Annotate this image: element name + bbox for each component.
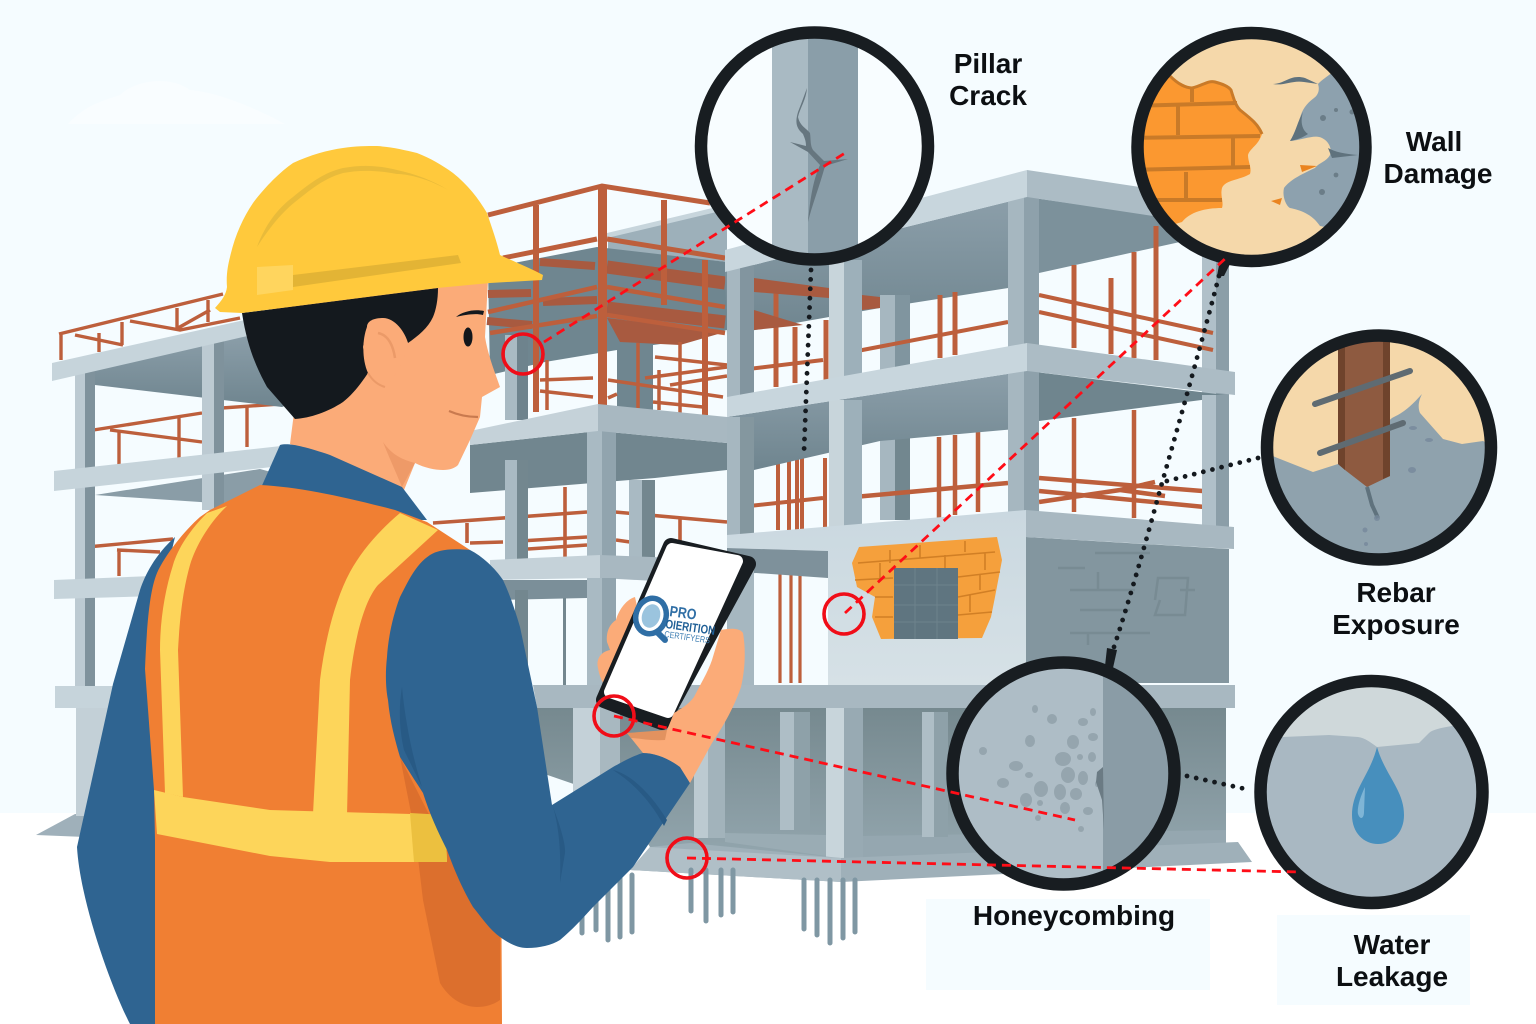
corroded rebar [1338, 329, 1390, 487]
label: wall damage: Wall [1406, 126, 1462, 157]
magnifier: honeycombing [947, 648, 1183, 891]
red callout line: wall damage [824, 256, 1228, 634]
label: water leakage: Water [1354, 929, 1430, 960]
front hand [627, 629, 745, 783]
voids [979, 705, 1099, 832]
exposed concrete [1284, 74, 1360, 227]
building: right wing [533, 170, 1252, 943]
mouth [449, 411, 478, 417]
water drop [1352, 747, 1404, 844]
label: pillar crack: Pillar [954, 48, 1022, 79]
eyebrow [456, 310, 484, 317]
magnifier: pillar crack [695, 27, 935, 267]
app logo [631, 594, 716, 645]
worker [77, 146, 748, 1024]
label: pillar crack: Crack [949, 80, 1027, 111]
app logo: OIERITION [665, 617, 716, 638]
building: left wing [36, 294, 300, 838]
label: wall damage [1384, 126, 1492, 189]
left wing rebar [59, 294, 280, 576]
right wing rebar [740, 226, 1215, 683]
smartphone [604, 546, 748, 722]
ground storey [533, 708, 1226, 860]
dotted connector: wall damage to honeycombing [1113, 276, 1219, 650]
jacket collar [260, 444, 427, 520]
sleeve folds [400, 687, 667, 883]
jaw shadow [383, 442, 415, 487]
label: rebar exposure [1332, 577, 1460, 640]
dotted connector: water leakage [1187, 776, 1250, 790]
label: wall damage: Damage [1384, 158, 1492, 189]
building: central wing with upper rebar [433, 186, 727, 686]
magnifier: wall damage [1131, 26, 1372, 276]
crack [790, 88, 848, 222]
exposed brick [1144, 77, 1262, 224]
foundation piles [582, 870, 855, 943]
magnifier tail [1105, 648, 1117, 668]
red callout line: pillar crack [503, 153, 845, 374]
left arm [77, 537, 175, 1024]
label: rebar exposure: Exposure [1332, 609, 1460, 640]
label: water leakage: Leakage [1336, 961, 1448, 992]
hair [242, 288, 438, 419]
eye [464, 328, 472, 346]
rebar cage [487, 186, 727, 415]
app logo: CERTIFYERS [664, 629, 711, 645]
red callout line: honeycombing [594, 696, 1075, 820]
magnifier: water leakage [1254, 660, 1490, 911]
label: pillar crack [949, 48, 1027, 111]
app logo: PRO [668, 603, 698, 624]
ear [363, 321, 408, 387]
label: honeycombing: Honeycombing [973, 900, 1175, 931]
vest stripes [160, 506, 227, 797]
label background panels [926, 899, 1470, 1005]
magnifier: rebar exposure [1261, 329, 1500, 570]
high-vis vest [145, 485, 502, 1024]
label: water leakage [1336, 929, 1448, 992]
gray face of lower wall [1026, 537, 1229, 683]
label: rebar exposure: Rebar [1356, 577, 1436, 608]
red callout line: water leakage [667, 838, 1300, 878]
magnifier tail [1217, 260, 1232, 276]
exposed brick in wall [852, 537, 1002, 639]
neck and face [270, 280, 500, 495]
hard hat [215, 146, 543, 313]
sleeve [386, 549, 690, 948]
dotted connector: pillar to building [804, 270, 811, 452]
dotted connector: rebar [1163, 458, 1258, 482]
back fingers [598, 597, 640, 692]
